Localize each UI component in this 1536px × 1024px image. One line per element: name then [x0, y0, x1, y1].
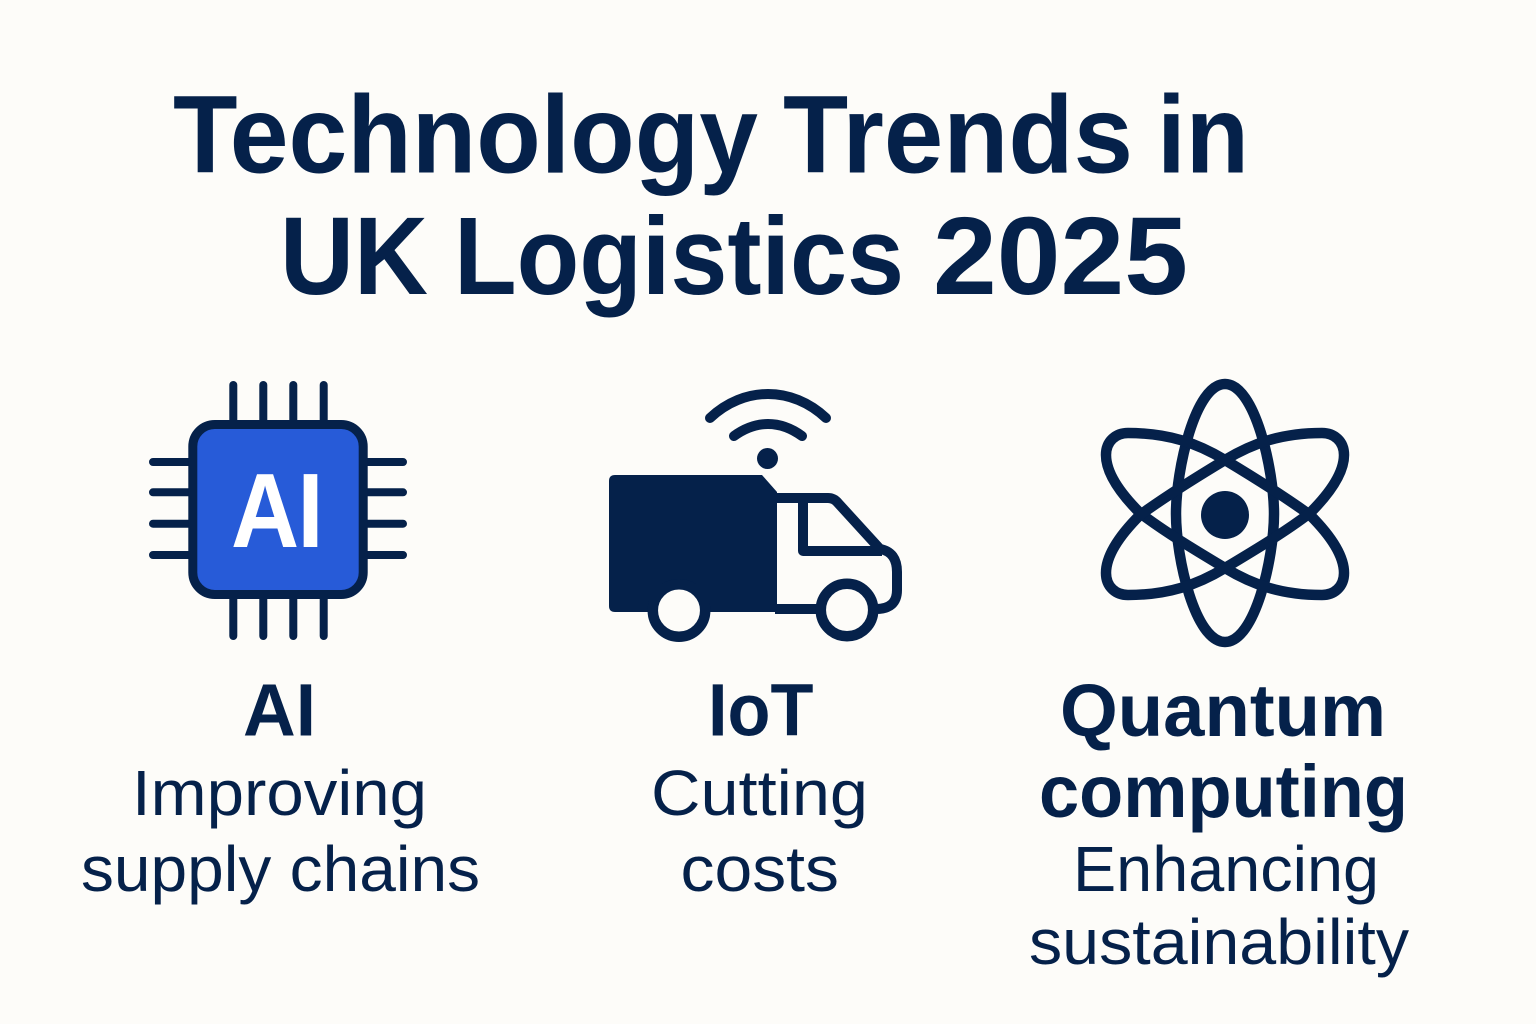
icon: IoT truck: [609, 394, 897, 637]
title: Trends: [783, 74, 1133, 196]
column: AI: AI: [243, 668, 316, 752]
column: AI: supply chains: [81, 833, 480, 905]
title: 2025: [933, 195, 1188, 318]
icon: AI chip: [153, 385, 403, 636]
column: IoT: [651, 668, 868, 905]
column: AI: [81, 668, 480, 905]
column: Quantum computing: computing: [1039, 750, 1408, 833]
title: [173, 74, 1249, 318]
column: Quantum computing: Quantum: [1060, 669, 1386, 752]
column: AI: Improving: [132, 757, 427, 829]
title: in: [1157, 74, 1249, 196]
column: IoT: Cutting: [651, 757, 868, 829]
column: Quantum computing: Enhancing: [1073, 833, 1379, 905]
column: Quantum computing: sustainability: [1029, 906, 1409, 978]
column: IoT: IoT: [708, 668, 814, 752]
icon: quantum atom: [1106, 384, 1344, 642]
icon: AI chip: AI: [231, 452, 324, 570]
title: Logistics: [454, 195, 904, 318]
title: Technology: [173, 74, 758, 196]
title: UK: [280, 195, 428, 318]
column: Quantum computing: [1029, 669, 1409, 978]
column: IoT: costs: [680, 833, 839, 905]
